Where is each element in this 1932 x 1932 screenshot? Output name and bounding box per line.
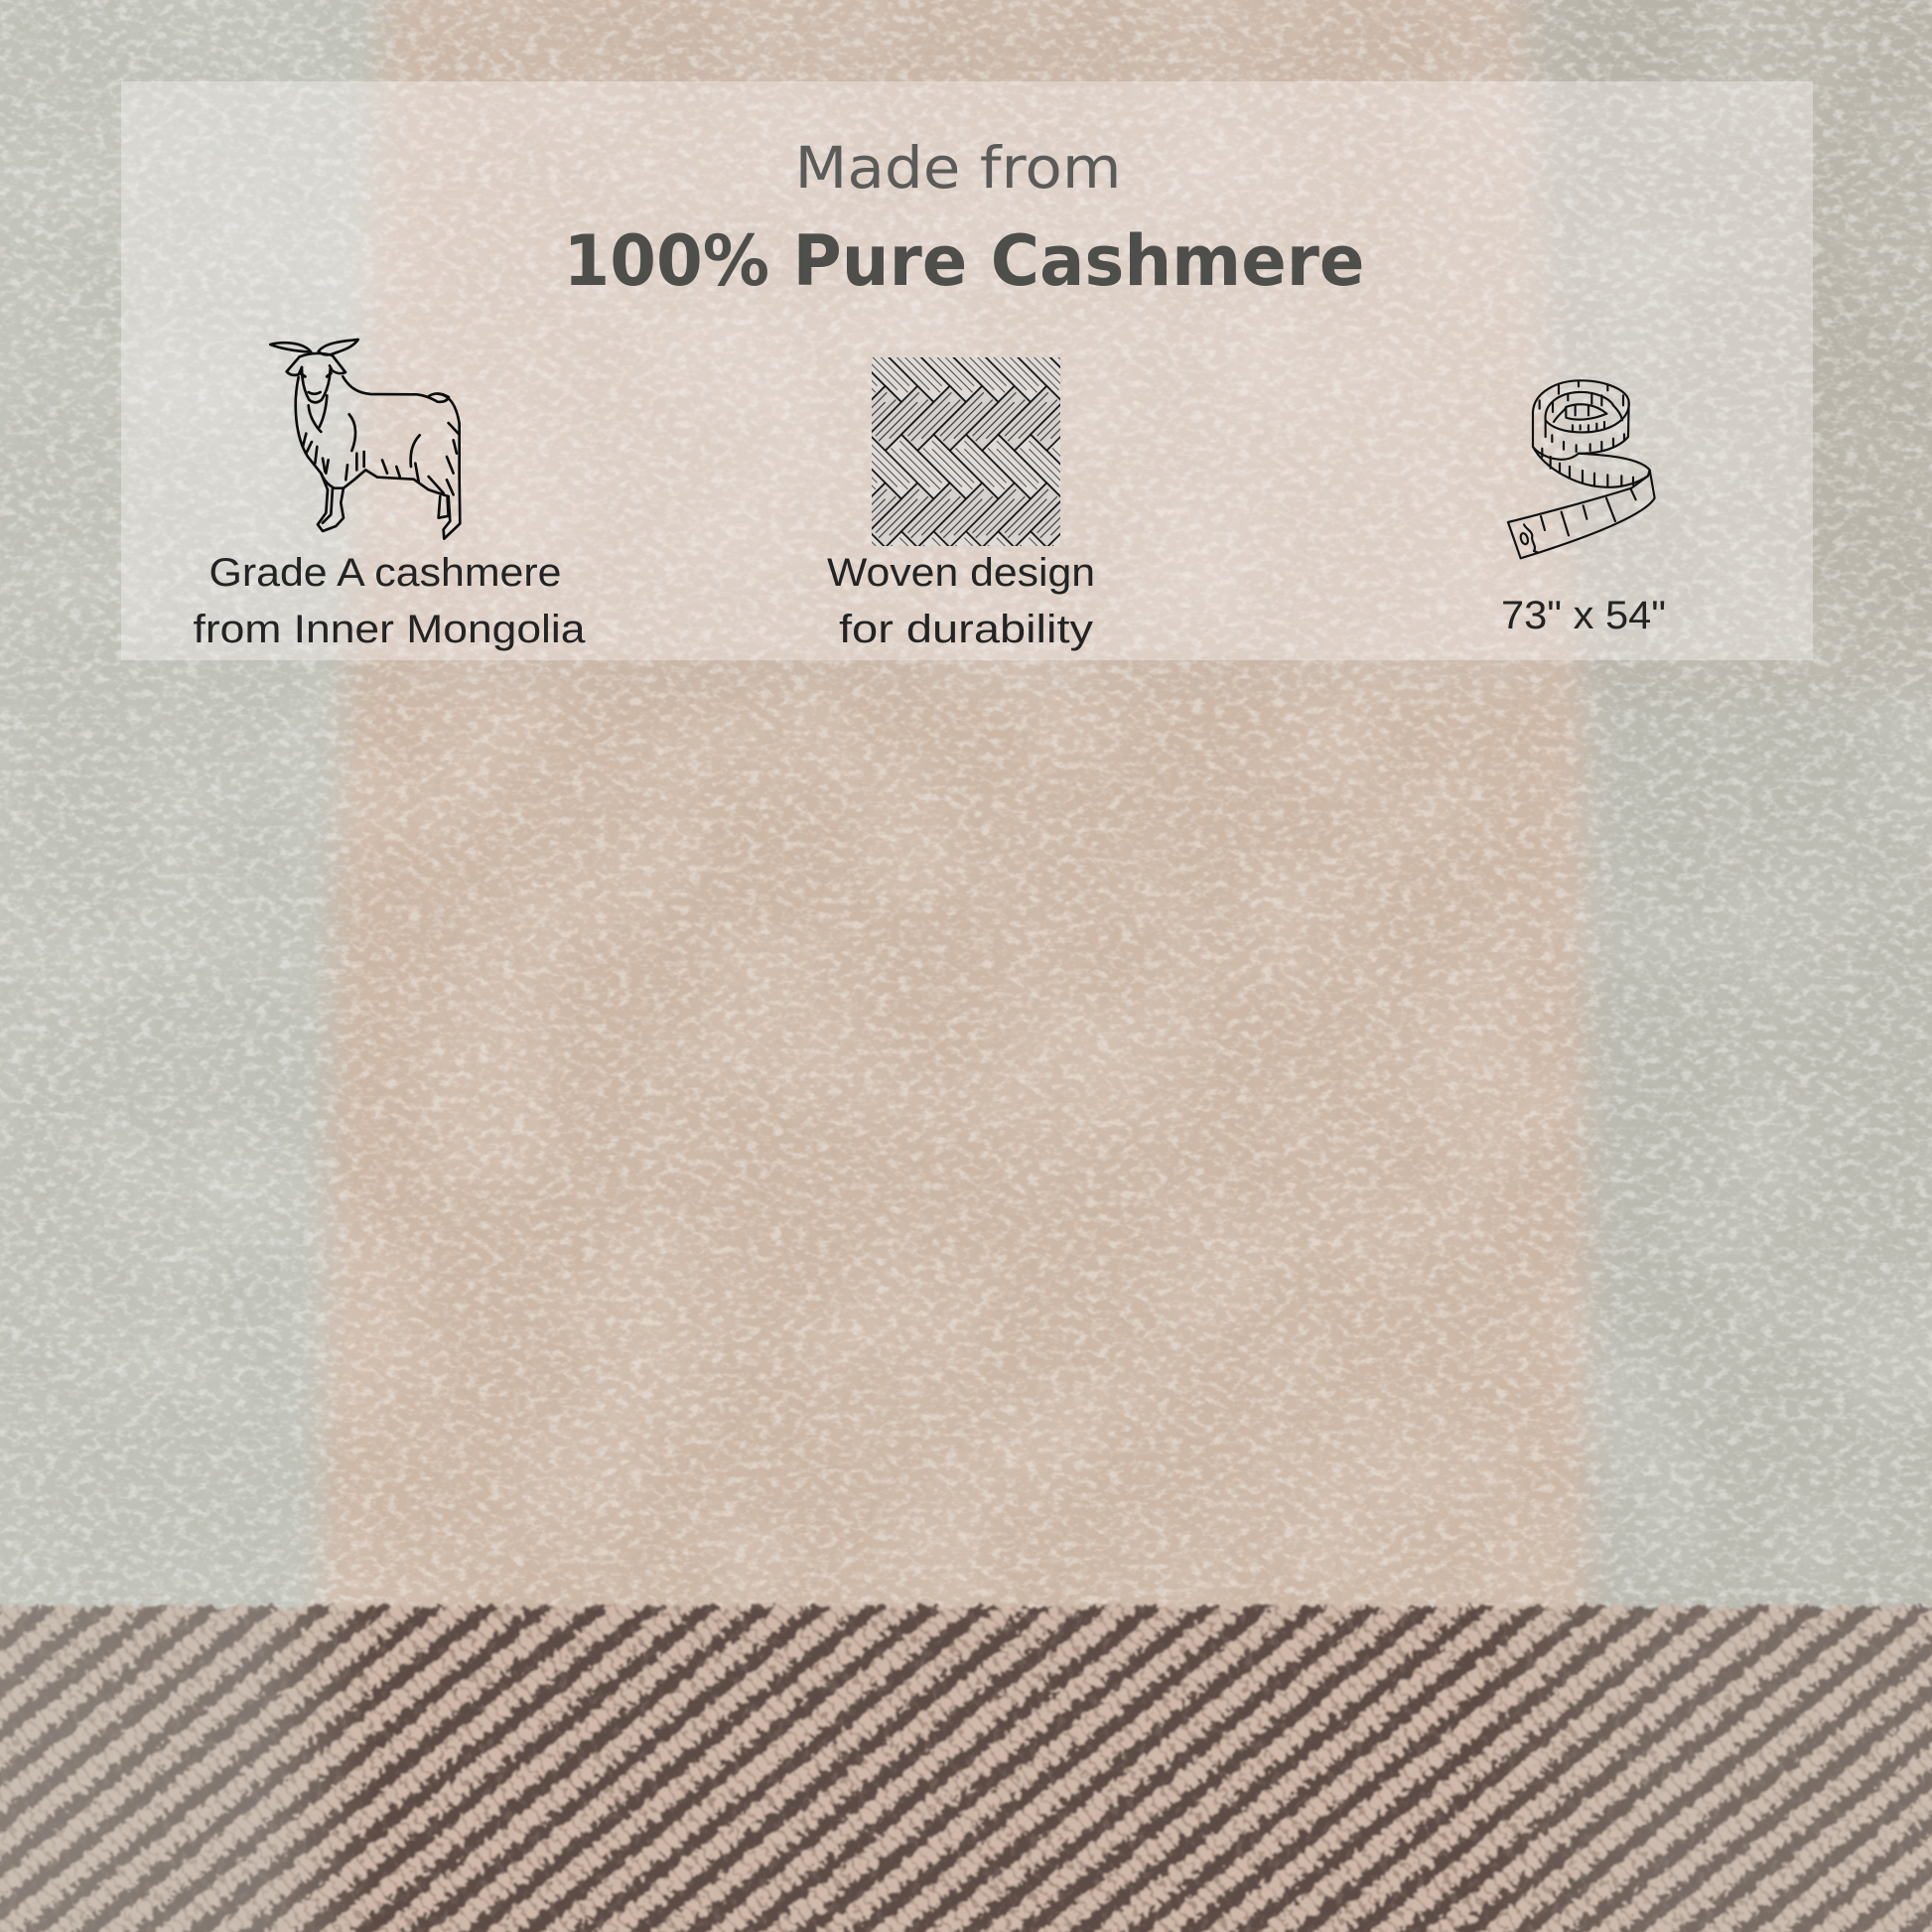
- label: dimensions 73" x 54": 73" x 54": [1501, 594, 1666, 637]
- heading: 100% Pure Cashmere: 100% Pure Cashmere: [564, 220, 1364, 302]
- label: Woven design for durability: [827, 551, 1095, 651]
- panel: translucent info panel: [121, 81, 1813, 660]
- label: Woven design for durability: for durability: [839, 608, 1093, 651]
- label: Grade A cashmere from Inner Mongolia: from Inner Mongolia: [193, 608, 586, 651]
- icon: goat: [270, 340, 460, 539]
- icon: measuring tape: [1508, 380, 1655, 558]
- heading: Made from: Made from: [794, 134, 1122, 202]
- label: Grade A cashmere from Inner Mongolia: Grade A cashmere: [208, 551, 562, 595]
- icon: woven basket pattern: [872, 357, 1060, 546]
- dark twill band along bottom: [0, 1606, 1932, 1932]
- label: Grade A cashmere from Inner Mongolia: [193, 551, 586, 651]
- label: Woven design for durability: Woven design: [827, 551, 1095, 595]
